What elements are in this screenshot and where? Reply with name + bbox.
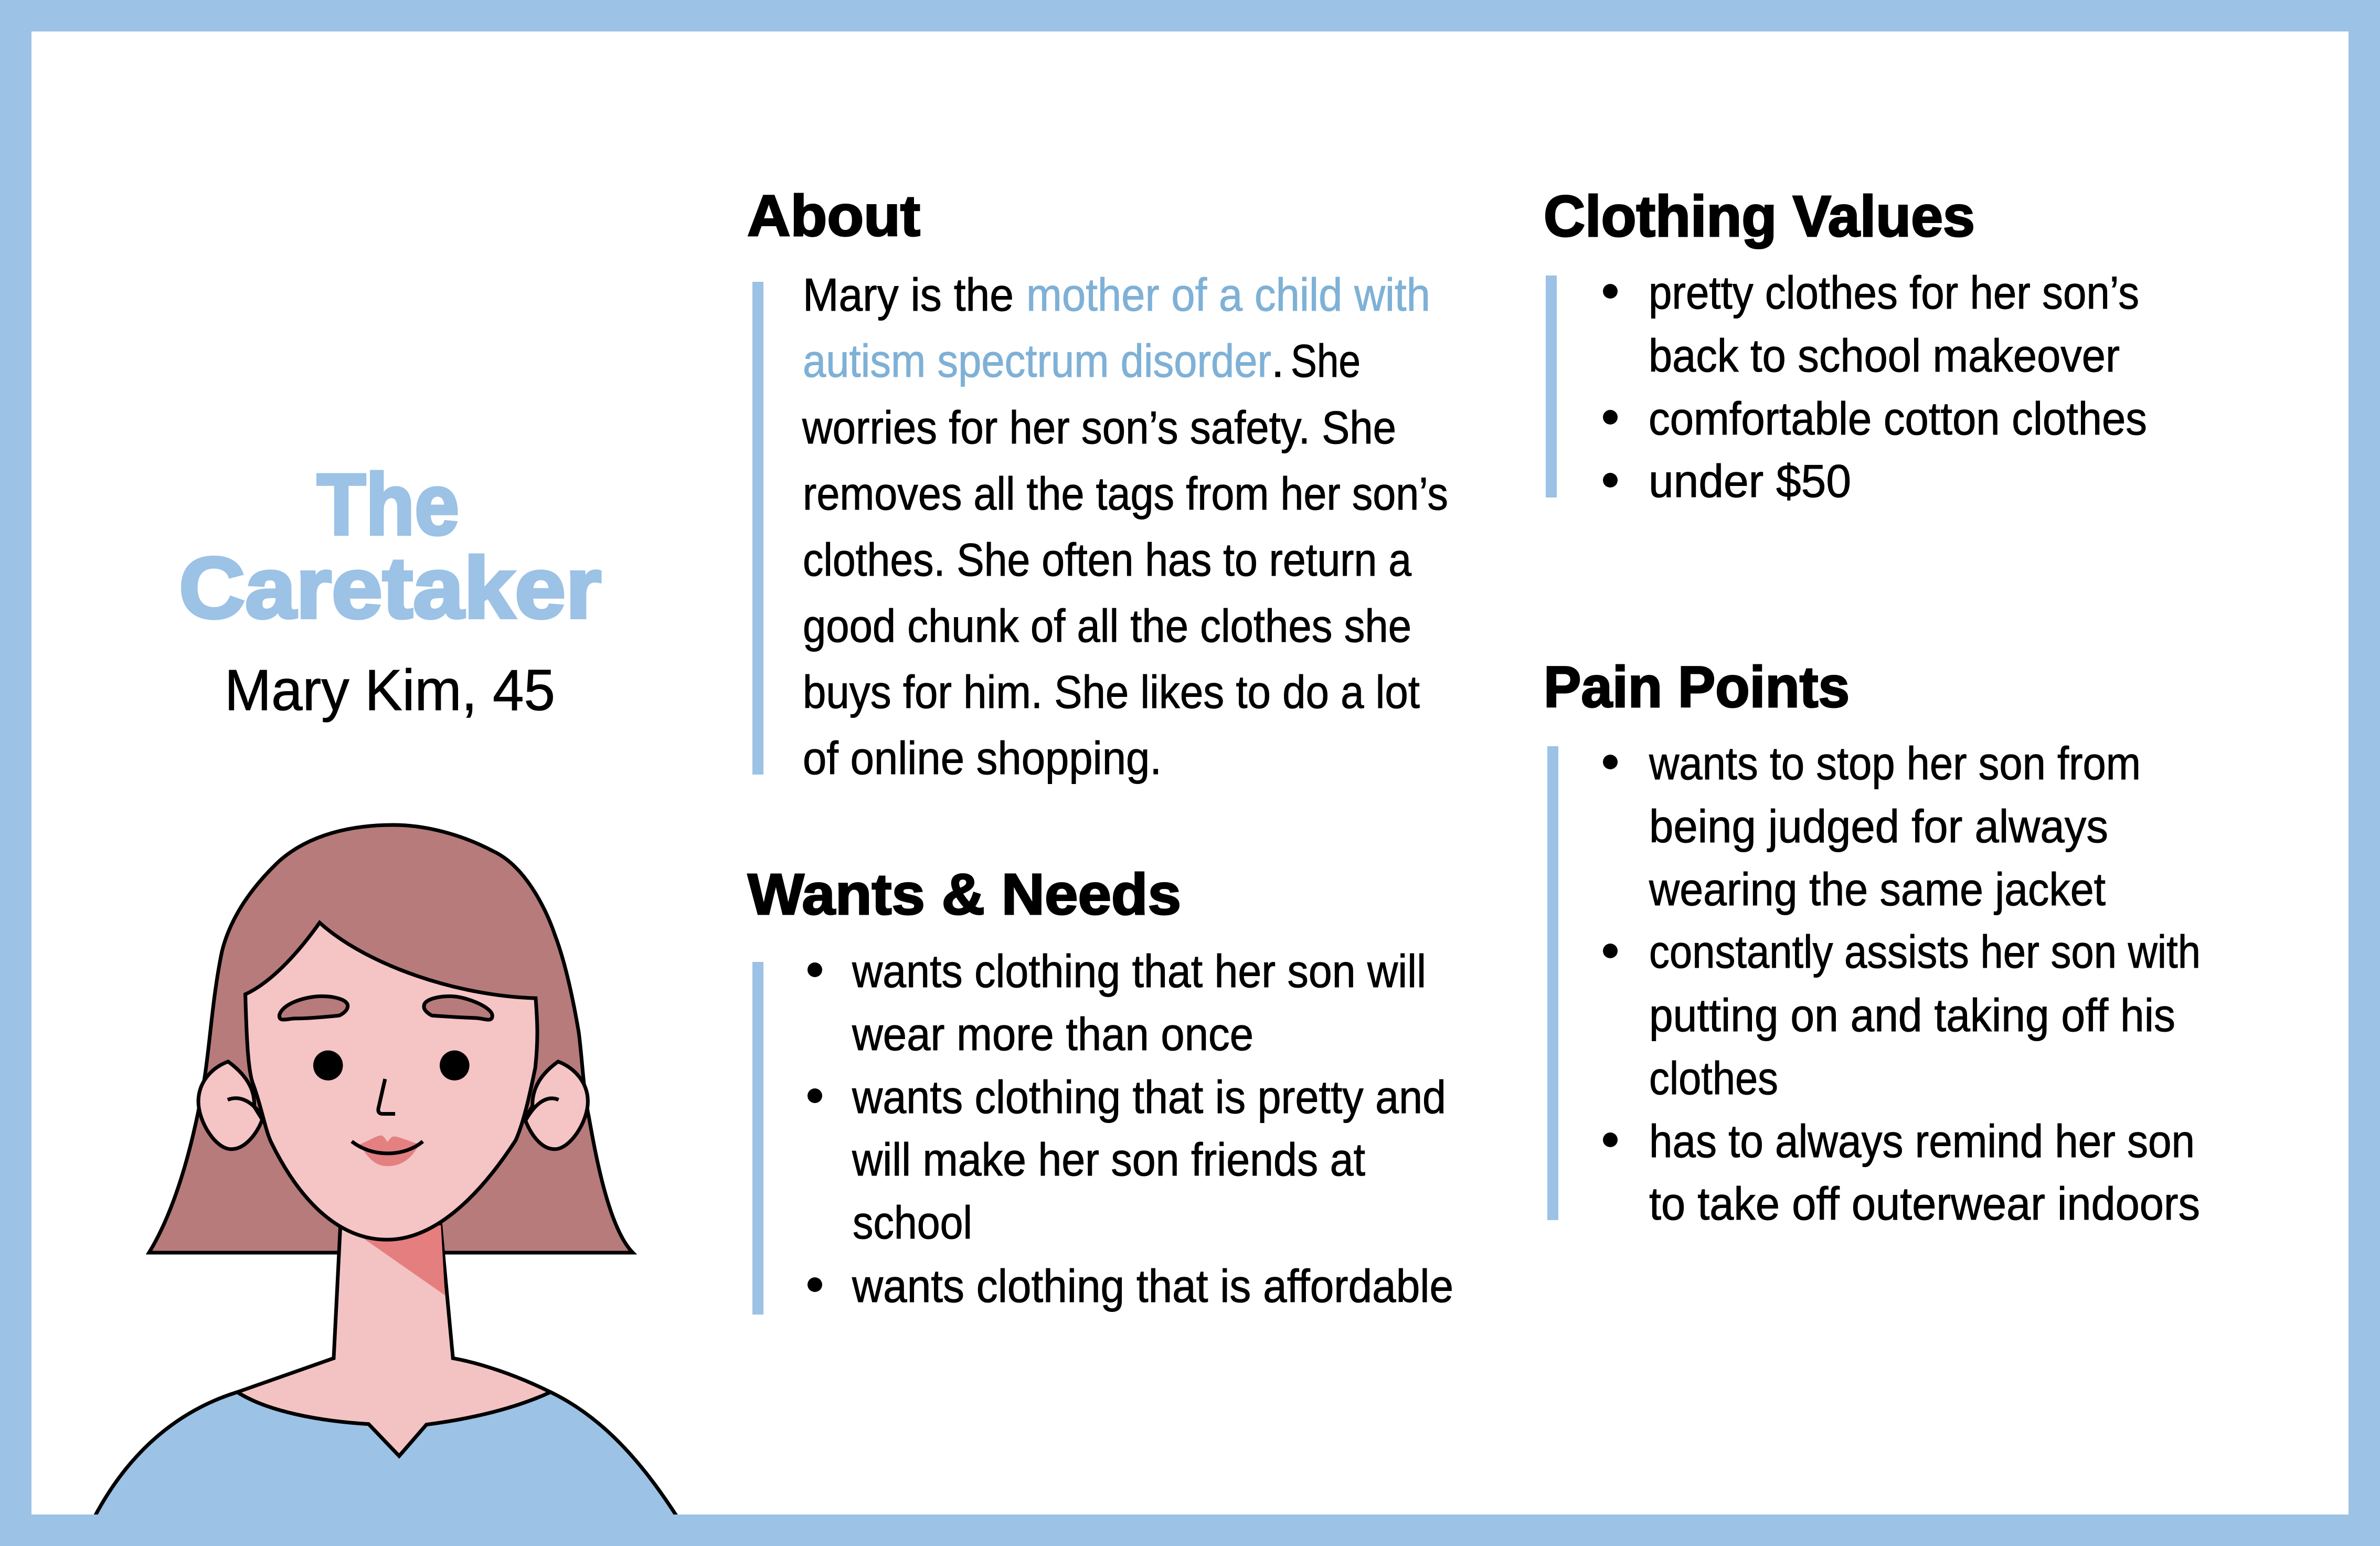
title: The Caretaker (179, 456, 601, 636)
values list: back to school makeover (1649, 330, 2120, 382)
about paragraph: autism spectrum disorder (803, 335, 1271, 387)
heading: Pain Points: Pain Points (1544, 655, 1850, 719)
about paragraph: buys for him. She likes to do a lot (803, 666, 1420, 718)
panel: Pain Points (1544, 655, 2201, 1230)
pain points list: putting on and taking off his (1649, 989, 2175, 1041)
shirt (94, 1392, 678, 1518)
values list: comfortable cotton clothes (1649, 393, 2147, 444)
values list: pretty clothes for her son’s (1649, 267, 2139, 319)
right ear (525, 1062, 588, 1149)
lips (360, 1136, 420, 1166)
wants list: wants clothing that her son will (852, 945, 1426, 997)
values list (1603, 267, 2147, 507)
right eyebrow (424, 996, 492, 1020)
pain points list: constantly assists her son with (1649, 926, 2201, 978)
about paragraph: Mary is the (803, 269, 1014, 321)
nose (378, 1079, 395, 1114)
about paragraph (802, 269, 1448, 784)
panel: About (747, 184, 1448, 784)
pain points list: being judged for always (1649, 800, 2108, 852)
name and age: Mary Kim, 45 (225, 658, 555, 723)
pain points list: clothes (1649, 1052, 1778, 1104)
right eye (440, 1051, 470, 1081)
accent bar (1546, 276, 1557, 497)
panel: Clothing Values (1544, 184, 2147, 507)
title: The Caretaker: Caretaker (179, 539, 601, 636)
wants list: will make her son friends at (852, 1134, 1365, 1185)
heading: About: About (747, 184, 920, 248)
about paragraph: clothes. She often has to return a (803, 534, 1411, 586)
title: The Caretaker: The (317, 456, 459, 553)
left eyebrow (279, 996, 348, 1020)
persona title block (179, 456, 601, 723)
about paragraph: worries for her son’s safety. She (802, 401, 1396, 453)
heading: Wants & Needs: Wants & Needs (748, 862, 1181, 927)
character illustration: Mary Kim portrait (94, 825, 678, 1518)
about paragraph: removes all the tags from her son’s (803, 468, 1448, 520)
left eye (313, 1051, 343, 1081)
face, neck and shirt (94, 923, 678, 1518)
wants list: wants clothing that is pretty and (852, 1071, 1446, 1123)
heading: Clothing Values: Clothing Values (1544, 184, 1975, 249)
pain points list (1603, 737, 2201, 1230)
pain points list: wearing the same jacket (1649, 863, 2106, 915)
pain points list: has to always remind her son (1649, 1115, 2195, 1167)
neck shadow (362, 1225, 445, 1295)
about paragraph: . (1271, 335, 1284, 387)
left ear (198, 1062, 263, 1149)
values list: under $50 (1649, 455, 1851, 507)
wants list (808, 945, 1453, 1312)
about paragraph: good chunk of all the clothes she (803, 600, 1411, 652)
wants list: wear more than once (852, 1008, 1253, 1060)
accent bar (752, 962, 763, 1315)
pain points list: to take off outerwear indoors (1649, 1178, 2200, 1230)
about paragraph: She (1291, 335, 1361, 387)
accent bar (1547, 746, 1558, 1220)
wants list: wants clothing that is affordable (852, 1260, 1453, 1312)
pain points list: wants to stop her son from (1649, 737, 2141, 789)
face (246, 923, 537, 1240)
hair (149, 825, 633, 1253)
mouth line (352, 1141, 423, 1153)
accent bar (752, 282, 763, 775)
about paragraph: of online shopping. (803, 732, 1162, 784)
neck and chest (237, 1220, 550, 1456)
wants list: school (853, 1196, 972, 1248)
about paragraph: mother of a child with (1026, 269, 1430, 321)
panel: Wants & Needs (748, 862, 1453, 1315)
